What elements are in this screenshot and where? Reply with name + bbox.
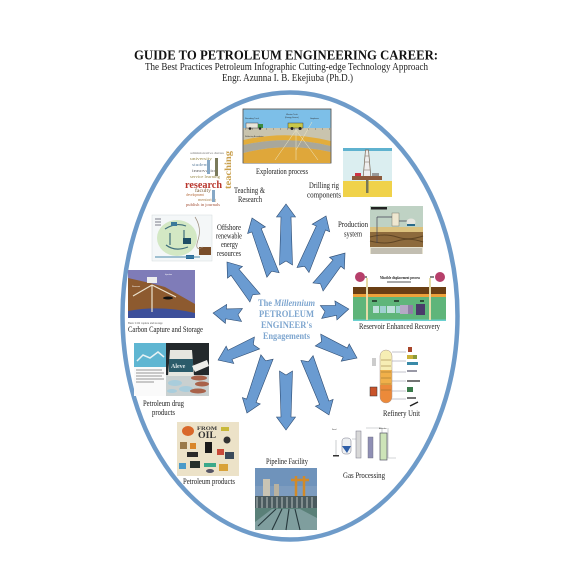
illustration: petroleum drug products (134, 343, 209, 396)
illustration: products from oil: OIL (198, 430, 216, 440)
illustration: word cloud: teaching (223, 150, 233, 189)
illustration: gas processing (332, 427, 397, 468)
illustration: word cloud (185, 150, 233, 207)
illustration: exploration seismic: Vibrator Truck (286, 113, 298, 116)
illustration: word cloud: mentoring (198, 197, 216, 202)
arrow: to production (311, 247, 352, 293)
centre heading: PETROLEUM (259, 310, 314, 320)
label: teaching and research (234, 186, 266, 204)
label: pipeline facility: Pipeline Facility (266, 457, 309, 466)
arrow: to carbon capture (212, 304, 243, 324)
illustration: carbon capture: Injection (165, 273, 172, 276)
arrow: to gas processing (298, 355, 338, 418)
arrow: to drug products (214, 334, 261, 369)
label: refinery unit: Refinery Unit (383, 409, 421, 418)
illustration: products from oil: FROM (197, 427, 217, 432)
label: offshore renewable energy (216, 223, 242, 258)
illustration: pipeline facility photo (255, 468, 317, 530)
label: drilling rig: Drilling rig (309, 181, 339, 190)
illustration: word cloud: service learning (190, 174, 220, 179)
title block: GUIDE TO PETROLEUM ENGINEERING CAREER: (134, 48, 438, 62)
illustration: word cloud: innovation (192, 168, 218, 173)
illustration: word cloud: publish in journals (186, 202, 221, 207)
illustration: petroleum drug products: Aleve (171, 364, 186, 370)
illustration: refinery column (370, 347, 420, 406)
title block: The Best Practices Petroleum Infographic Cutting-edge Technology Approach (145, 62, 429, 73)
label: teaching and research: Teaching & (234, 186, 266, 195)
illustration: production system (370, 206, 423, 254)
centre heading: Engagements (263, 332, 310, 342)
illustration: carbon capture (128, 270, 195, 318)
illustration: exploration seismic: Recording Truck (245, 117, 259, 120)
label: production system (338, 220, 368, 238)
label: drilling rig (307, 181, 341, 200)
label: gas processing: Gas Processing (343, 471, 385, 480)
title block (134, 48, 438, 84)
label: offshore renewable energy: Offshore (217, 223, 241, 232)
illustration: word cloud: administrative duties (190, 151, 225, 155)
illustration: reservoir enhanced recovery: Miscible displacement process (380, 275, 420, 280)
illustration: word cloud: faculty (195, 189, 212, 194)
title block: Engr. Azunna I. B. Ekejiuba (Ph.D.) (222, 73, 353, 84)
arrow: to pipeline (276, 371, 296, 430)
illustration: exploration seismic: Reflecting Boundaries (245, 135, 264, 138)
illustration: gas processing: Absorber (379, 427, 387, 430)
label: carbon capture and storage (128, 322, 203, 334)
oval frame (122, 92, 458, 540)
illustration: drilling rig (343, 148, 392, 197)
label: offshore renewable energy: resources (217, 249, 241, 258)
illustration: offshore renewable energy (152, 215, 212, 261)
illustration: word cloud: development (186, 192, 205, 197)
centre heading (258, 299, 315, 342)
illustration: word cloud: university (190, 156, 212, 161)
centre heading: The Millennium (258, 299, 315, 309)
arrows (212, 204, 361, 430)
arrow: to reservoir recovery (320, 300, 350, 321)
label: petroleum drug products: Petroleum drug (143, 399, 184, 408)
arrow: to refinery (314, 331, 361, 367)
illustration: carbon capture: Reservoir (132, 285, 140, 288)
illustration: products from oil (177, 422, 239, 476)
label: petroleum drug products: products (152, 408, 175, 417)
label: offshore renewable energy: energy (221, 240, 239, 249)
label: teaching and research: Research (238, 195, 262, 204)
centre heading: ENGINEER's (261, 321, 312, 331)
arrow: to petroleum products (238, 354, 276, 416)
illustration: word cloud: research (185, 180, 222, 191)
illustration: exploration seismic: (Energy Source) (285, 116, 299, 119)
illustration: exploration seismic: Geophone (310, 118, 319, 120)
label: drilling rig: components (307, 190, 341, 200)
label: production system: system (344, 230, 363, 238)
illustration: gas processing: Feed (332, 429, 336, 431)
illustration: exploration seismic (243, 109, 331, 163)
label: carbon capture and storage: Carbon Capture and Storage (128, 325, 203, 334)
label: offshore renewable energy: renewable (216, 232, 242, 240)
arrow: to drilling rig (294, 212, 335, 274)
arrow: to teaching (243, 215, 282, 278)
arrow: to exploration (276, 204, 296, 265)
label: production system: Production (338, 220, 368, 229)
illustration: reservoir enhanced recovery (353, 272, 446, 321)
label: petroleum drug products (143, 399, 184, 417)
label: petroleum products: Petroleum products (183, 477, 235, 486)
label: exploration: Exploration process (256, 167, 308, 176)
arrow: to offshore (219, 256, 262, 304)
label: reservoir enhanced recovery: Reservoir Enhanced Recovery (359, 322, 441, 331)
illustration: word cloud: students (192, 162, 211, 167)
label: carbon capture and storage: Basic CO2 capture and storage (128, 322, 163, 325)
